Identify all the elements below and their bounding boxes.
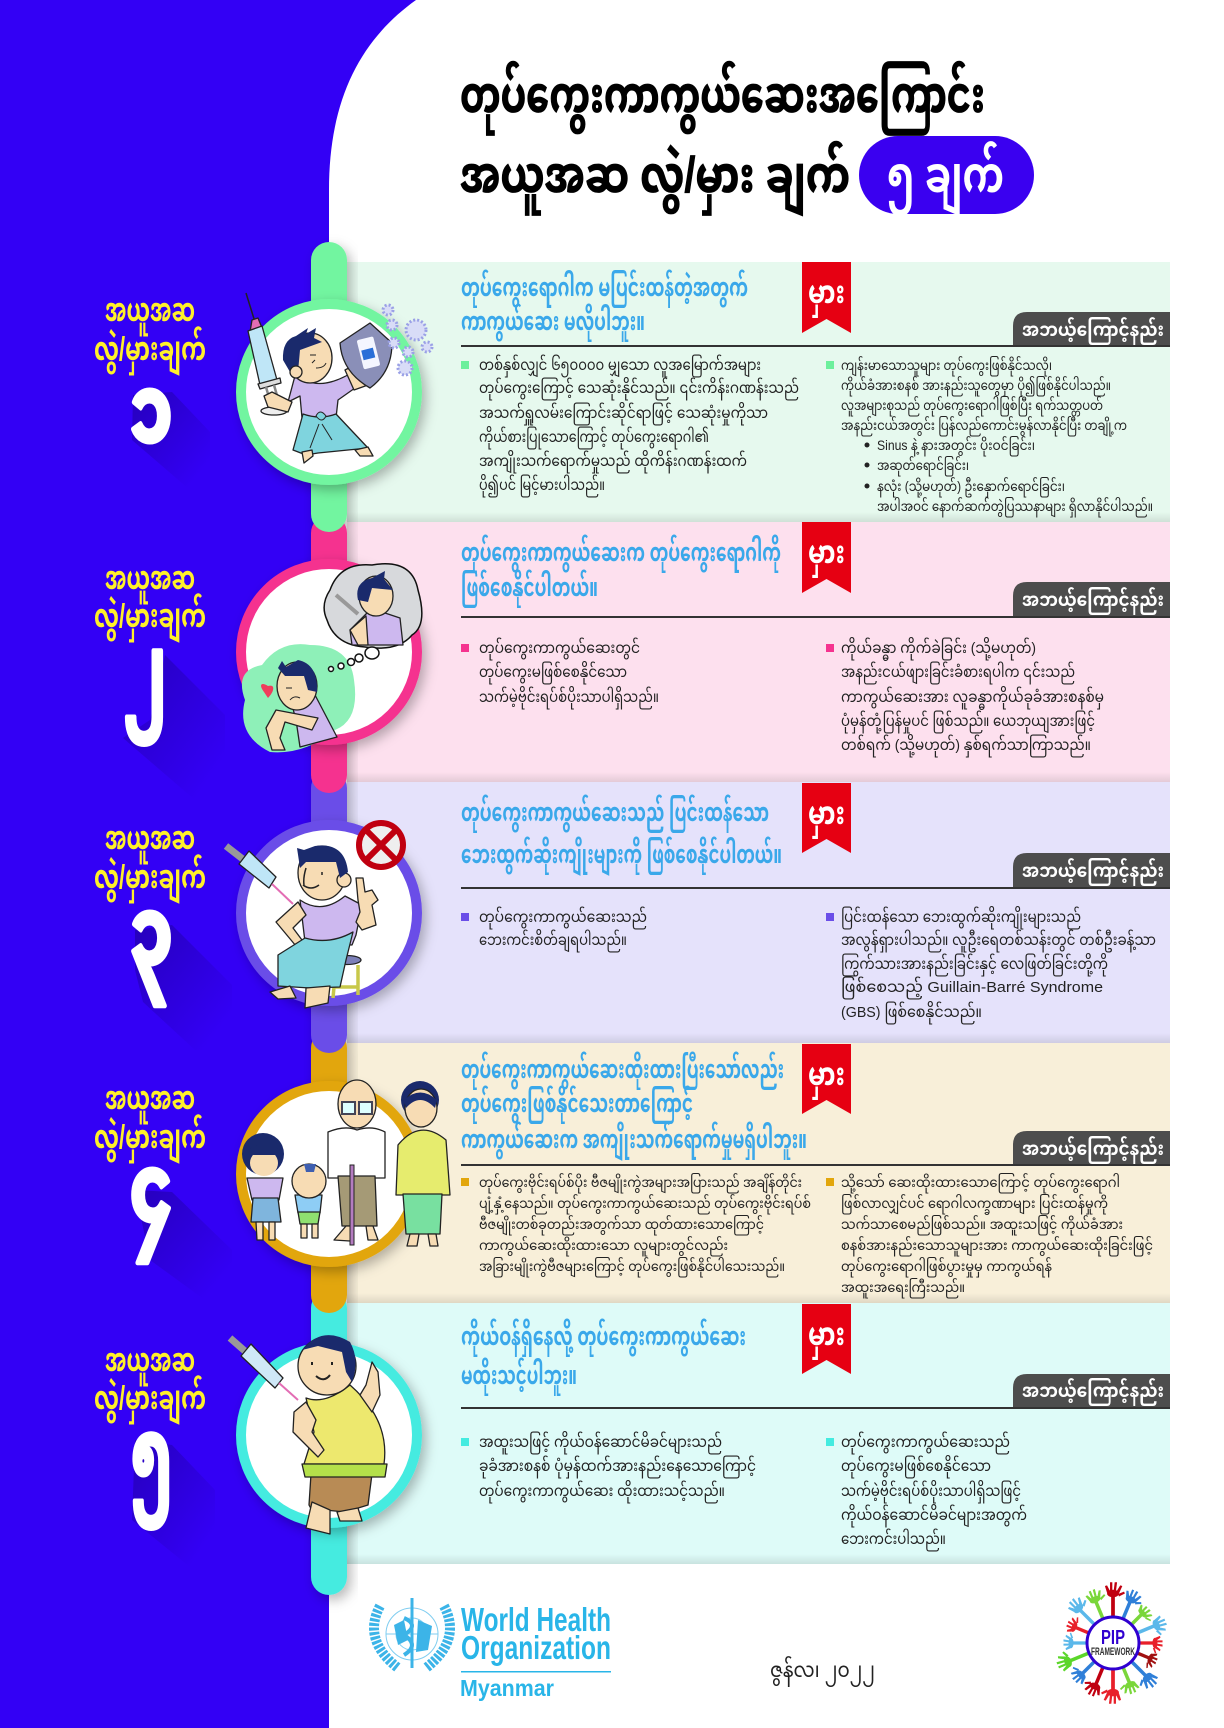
panel 1 right text [826, 355, 1153, 518]
label 4: myth four: လွဲ/မှားချက် [94, 1114, 206, 1164]
panel 5 left text [461, 1432, 756, 1503]
panel 1 right text: လူအများစုသည် တုပ်ကွေးရောဂါဖြစ်ပြီး ရက်သတ္တပတ် [841, 395, 1103, 417]
panel 1 myth bookmark: မှား [808, 274, 845, 318]
panel 5 right text [826, 1432, 1027, 1551]
panel 4 why tab: အဘယ့်ကြောင့်နည်း [1022, 1135, 1164, 1164]
panel 5 right text: ကိုယ်ဝန်ဆောင်မိခင်များအတွက် [841, 1505, 1027, 1527]
panel 4 heading [461, 1050, 807, 1161]
panel 2 heading: တုပ်ကွေးကာကွယ်ဆေးက တုပ်ကွေးရောဂါကို [461, 533, 781, 574]
panel 5 myth bookmark [802, 1304, 851, 1374]
panel 3 right text: အလွန်ရှားပါသည်။ လူဦးရေတစ်သန်းတွင် တစ်ဦးခန့်သာ [841, 930, 1156, 952]
panel 4 left text: ဗီဇမျိုးတစ်ခုတည်းအတွက်သာ ထုတ်ထားသောကြောင့် [479, 1214, 764, 1236]
panel 4 heading: တုပ်ကွေးကာကွယ်ဆေးထိုးထားပြီးသော်လည်း [461, 1050, 784, 1091]
title [460, 61, 1034, 216]
logo: World Health Organization Myanmar [374, 1598, 611, 1701]
panel 4 right text [826, 1172, 1153, 1299]
panel 5 right text: တုပ်ကွေးမဖြစ်စေနိုင်သော [841, 1456, 991, 1478]
panel 5 left text: ခုခံအားစနစ် ပုံမှန်ထက်အားနည်းနေသောကြောင့် [479, 1456, 756, 1478]
panel 2 heading [461, 533, 781, 609]
virus cluster [383, 305, 432, 375]
panel 3 left text [461, 907, 647, 952]
label 3: myth three [94, 819, 206, 1006]
panel 1 right text: အဆုတ်ရောင်ခြင်း၊ [877, 455, 969, 477]
panel 1 myth bookmark [802, 262, 851, 333]
title: တုပ်ကွေးကာကွယ်ဆေးအကြောင်း [460, 61, 985, 135]
panel 3 right text: ဖြစ်စေသည့် Guillain-Barré Syndrome [841, 977, 1103, 999]
panel 4: vaccinated still flu [347, 1043, 1170, 1303]
panel 4 heading: တုပ်ကွေးဖြစ်နိုင်သေးတာကြောင့် [461, 1084, 693, 1125]
label 4: myth four: အယူအဆ [105, 1079, 195, 1124]
panel 1 right text: ကျန်းမာသောသူများ တုပ်ကွေးဖြစ်နိုင်သလို၊ [841, 355, 1052, 377]
panel 2 myth bookmark: မှား [808, 534, 845, 578]
panel 4 left text: ပျံ့နှံ့နေသည်။ တုပ်ကွေးကာကွယ်ဆေးသည် တုပ်ကွေးဗိုင်းရပ်စ် [479, 1193, 811, 1215]
label 5: myth five: လွဲ/မှားချက် [94, 1375, 206, 1425]
toddler [292, 1164, 326, 1238]
illustration 5: pregnant woman [230, 1335, 417, 1534]
panel 4 left text: အခြားမျိုးကွဲဗီဇများကြောင့် တုပ်ကွေးဖြစ်နိုင်ပါသေးသည်။ [479, 1256, 785, 1278]
logo: World Health Organization Myanmar: Organization [461, 1629, 611, 1666]
panel 5 left text: တုပ်ကွေးကာကွယ်ဆေး ထိုးထားသင့်သည်။ [479, 1481, 725, 1503]
label 5: myth five: အယူအဆ [105, 1341, 195, 1386]
background: purple sidebar [0, 0, 416, 1728]
panel 1 why tab [1013, 312, 1170, 346]
title badge: 5 points: ၅ ချက် [886, 141, 1004, 216]
panel 2 right text: ကာကွယ်ဆေးအား လူခန္ဓာကိုယ်ခုခံအားစနစ်မှ [841, 687, 1104, 709]
panel 2 left text: တုပ်ကွေးမဖြစ်စေနိုင်သော [479, 662, 627, 684]
panel 3 myth bookmark [802, 783, 851, 853]
panel 3 heading: တုပ်ကွေးကာကွယ်ဆေးသည် ပြင်းထန်သော [461, 793, 769, 834]
panel 5 heading: ကိုယ်ဝန်ရှိနေလို့ တုပ်ကွေးကာကွယ်ဆေး [461, 1317, 746, 1358]
panel 1 left text: ကိုယ်စားပြုသောကြောင့် တုပ်ကွေးရောဂါ၏ [479, 427, 709, 449]
logo: World Health Organization Myanmar: World Health [461, 1601, 611, 1638]
panel 2 left text: တုပ်ကွေးကာကွယ်ဆေးတွင် [479, 638, 640, 660]
panel 4 left text [461, 1172, 811, 1278]
panel 5 left text: အထူးသဖြင့် ကိုယ်ဝန်ဆောင်မိခင်များသည် [479, 1432, 722, 1454]
panel 1: mild disease [347, 262, 1170, 522]
date: ဇွန်လ၊ ၂၀၂၂ [770, 1654, 875, 1687]
mother [396, 1081, 450, 1246]
illustration 2: man with sore arm imagining [241, 564, 422, 752]
panel 1 left text: တုပ်ကွေးကြောင့် သေဆုံးနိုင်သည်။ ၎င်းကိန်းဂဏန်းသည် [479, 378, 799, 400]
panel 3 left text: ဘေးကင်းစိတ်ချရပါသည်။ [479, 930, 627, 952]
panel 2 why tab: အဘယ့်ကြောင့်နည်း [1022, 586, 1164, 615]
panel 2 myth bookmark [802, 522, 851, 593]
panel 5: pregnancy [347, 1303, 1170, 1564]
panel 1 right text: အပါအဝင် နောက်ဆက်တွဲပြဿနာများ ရှိလာနိုင်ပါသည်။ [877, 496, 1153, 518]
panel 2 right text: အနည်းငယ်ဖျားခြင်းခံစားရပါက ၎င်းသည် [841, 662, 1075, 684]
panel 3 myth bookmark: မှား [808, 795, 845, 839]
grandfather [328, 1080, 385, 1245]
panel 3 right text: (GBS) ဖြစ်စေနိုင်သည်။ [841, 1002, 982, 1024]
panel 3: side effects [347, 782, 1170, 1043]
label 1: myth one: လွဲ/မှားချက် [94, 326, 206, 376]
label 1: myth one [94, 291, 206, 461]
panel 5 why tab: အဘယ့်ကြောင့်နည်း [1022, 1377, 1164, 1406]
panel 2 left text [461, 638, 659, 709]
panel 3 right text: ပြင်းထန်သော ဘေးထွက်ဆိုးကျိုးများသည် [841, 907, 1081, 929]
long shadows of numerals [123, 392, 232, 1567]
panel 4 right text: အထူးအရေးကြီးသည်။ [841, 1277, 965, 1299]
panel 1 right text: Sinus နဲ့ နားအတွင်း ပိုးဝင်ခြင်း၊ [877, 435, 1035, 457]
panel 1 left text: အကျိုးသက်ရောက်မှုသည် ထိုကိန်းဂဏန်းထက် [479, 451, 747, 473]
panel 5 heading: မထိုးသင့်ပါဘူး။ [461, 1356, 577, 1397]
panel 4 right text: သို့သော် ဆေးထိုးထားသောကြောင့် တုပ်ကွေးရောဂါ [841, 1172, 1120, 1194]
label 3: myth three: လွဲ/မှားချက် [94, 854, 206, 904]
title: အယူအဆ လွဲ/မှား ချက် [460, 141, 850, 216]
panel 4 myth bookmark [802, 1044, 851, 1114]
illustration 1: man with syringe and shield [241, 293, 432, 480]
panel 1 heading: ကာကွယ်ဆေး မလိုပါဘူး။ [461, 302, 645, 343]
panel 5 heading [461, 1317, 746, 1397]
panel 4 heading: ကာကွယ်ဆေးက အကျိုးသက်ရောက်မှုမရှိပါဘူး။ [461, 1120, 807, 1161]
panel 1 why tab: အဘယ့်ကြောင့်နည်း [1022, 316, 1164, 345]
label 5: myth five: ၅ [130, 1403, 172, 1529]
label 2: myth two: ၂ [124, 619, 166, 745]
panel 2 right text: ပုံမှန်တုံ့ပြန်မှုပင် ဖြစ်သည်။ ယေဘုယျအားဖြင့် [841, 711, 1095, 733]
panel 4 right text: တုပ်ကွေးရောဂါဖြစ်ပွားမှုမှ ကာကွယ်ရန် [841, 1256, 1052, 1278]
illustration 3: man with thumbs up [226, 823, 417, 1008]
panel 4 right text: ဖြစ်လာလျှင်ပင် ရောဂါလက္ခဏာများ ပြင်းထန်မှုကို [841, 1193, 1108, 1215]
timeline spines [311, 242, 347, 1595]
panel 5 right text: ဘေးကင်းပါသည်။ [841, 1529, 946, 1551]
panel 2: vaccine causes flu [347, 522, 1170, 782]
panel 2 right text [826, 638, 1104, 757]
label 2: myth two: အယူအဆ [105, 559, 195, 604]
panel 1 left text: ပို၍ပင် မြင့်မားပါသည်။ [479, 475, 605, 497]
logo: PIP framework hands: PIP [1101, 1627, 1125, 1649]
panel 5 right text: သက်မဲ့ဗိုင်းရပ်စ်ပိုးသာပါရှိသဖြင့် [841, 1481, 1021, 1503]
panel 3 left text: တုပ်ကွေးကာကွယ်ဆေးသည် [479, 907, 647, 929]
label 1: myth one: ၁ [130, 359, 172, 461]
panel 5 why tab [1013, 1374, 1170, 1408]
girl [242, 1133, 284, 1240]
panel 3 right text: ကြွက်သားအားနည်းခြင်းနှင့် လေဖြတ်ခြင်းတို့ကို [841, 954, 1108, 976]
panel 1 left text: တစ်နှစ်လျှင် ၆၅၀၀၀၀ မျှသော လူအမြောက်အများ [479, 355, 761, 377]
panel 5 myth bookmark: မှား [808, 1316, 845, 1360]
panel 3 heading [461, 793, 782, 876]
panel 2 left text: သက်မဲ့ဗိုင်းရပ်စ်ပိုးသာပါရှိသည်။ [479, 687, 659, 709]
panel 1 right text: အနည်းငယ်အတွင်း ပြန်လည်ကောင်းမွန်လာနိုင်ပြီး တချို့က [841, 415, 1127, 437]
label 1: myth one: အယူအဆ [105, 291, 195, 336]
panel 1 heading: တုပ်ကွေးရောဂါက မပြင်းထန်တဲ့အတွက် [461, 268, 748, 309]
label 2: myth two: လွဲ/မှားချက် [94, 593, 206, 643]
label 4: myth four [94, 1079, 206, 1263]
label 3: myth three: ၃ [130, 881, 172, 1006]
logo: PIP framework hands: FRAMEWORK [1091, 1646, 1135, 1658]
panel 3 why tab: အဘယ့်ကြောင့်နည်း [1022, 857, 1164, 886]
label 4: myth four: ၄ [130, 1138, 172, 1263]
panel 2 right text: တစ်ရက် (သို့မဟုတ်) နှစ်ရက်သာကြာသည်။ [841, 735, 1091, 757]
panel 2 heading: ဖြစ်စေနိုင်ပါတယ်။ [461, 568, 598, 609]
panel 4 right text: သက်သာစေမည်ဖြစ်သည်။ အထူးသဖြင့် ကိုယ်ခံအား [841, 1214, 1123, 1236]
panel 1 right text: နလုံး (သို့မဟုတ်) ဦးနှောက်ရောင်ခြင်း၊ [877, 476, 1065, 498]
panel 4 myth bookmark: မှား [808, 1056, 845, 1100]
panel 1 left text: အသက်ရှူလမ်းကြောင်းဆိုင်ရာဖြင့် သေဆုံးမှုကိုသာ [479, 403, 768, 425]
title badge: 5 points [859, 136, 1034, 216]
panel 5 right text: တုပ်ကွေးကာကွယ်ဆေးသည် [841, 1432, 1010, 1454]
label 5: myth five [94, 1341, 206, 1529]
panel 2 right text: ကိုယ်ခန္ဓာ ကိုက်ခဲခြင်း (သို့မဟုတ်) [841, 638, 1036, 660]
label 3: myth three: အယူအဆ [105, 819, 195, 864]
WHO emblem [374, 1598, 450, 1668]
logo: PIP framework hands [1054, 1582, 1170, 1704]
panel 3 heading: ဘေးထွက်ဆိုးကျိုးများကို ဖြစ်စေနိုင်ပါတယ်။ [461, 835, 782, 876]
no-toxin sign [359, 823, 403, 867]
panel 4 left text: ကာကွယ်ဆေးထိုးထားသော လူများတွင်လည်း [479, 1235, 728, 1257]
panel 2 why tab [1013, 582, 1170, 617]
panel 3 right text [826, 907, 1156, 1024]
panel 1 right text: ကိုယ်ခံအားစနစ် အားနည်းသူတွေမှာ ပို၍ဖြစ်နိုင်ပါသည်။ [841, 375, 1111, 397]
label 2: myth two [94, 559, 206, 745]
logo: World Health Organization Myanmar: Myanmar [460, 1675, 554, 1701]
panel 3 why tab [1013, 853, 1170, 888]
panel 4 why tab [1013, 1131, 1170, 1165]
panel 4 left text: တုပ်ကွေးဗိုင်းရပ်စ်ပိုး ဗီဇမျိုးကွဲအများအပြားသည် အချိန်တိုင်း [479, 1172, 802, 1194]
panel 1 left text [461, 355, 799, 497]
illustration 4: family group [241, 1080, 450, 1262]
panel 1 heading [461, 268, 748, 343]
panel 4 right text: စနစ်အားနည်းသောသူများအား ကာကွယ်ဆေးထိုးခြင်းဖြင့် [841, 1235, 1153, 1257]
